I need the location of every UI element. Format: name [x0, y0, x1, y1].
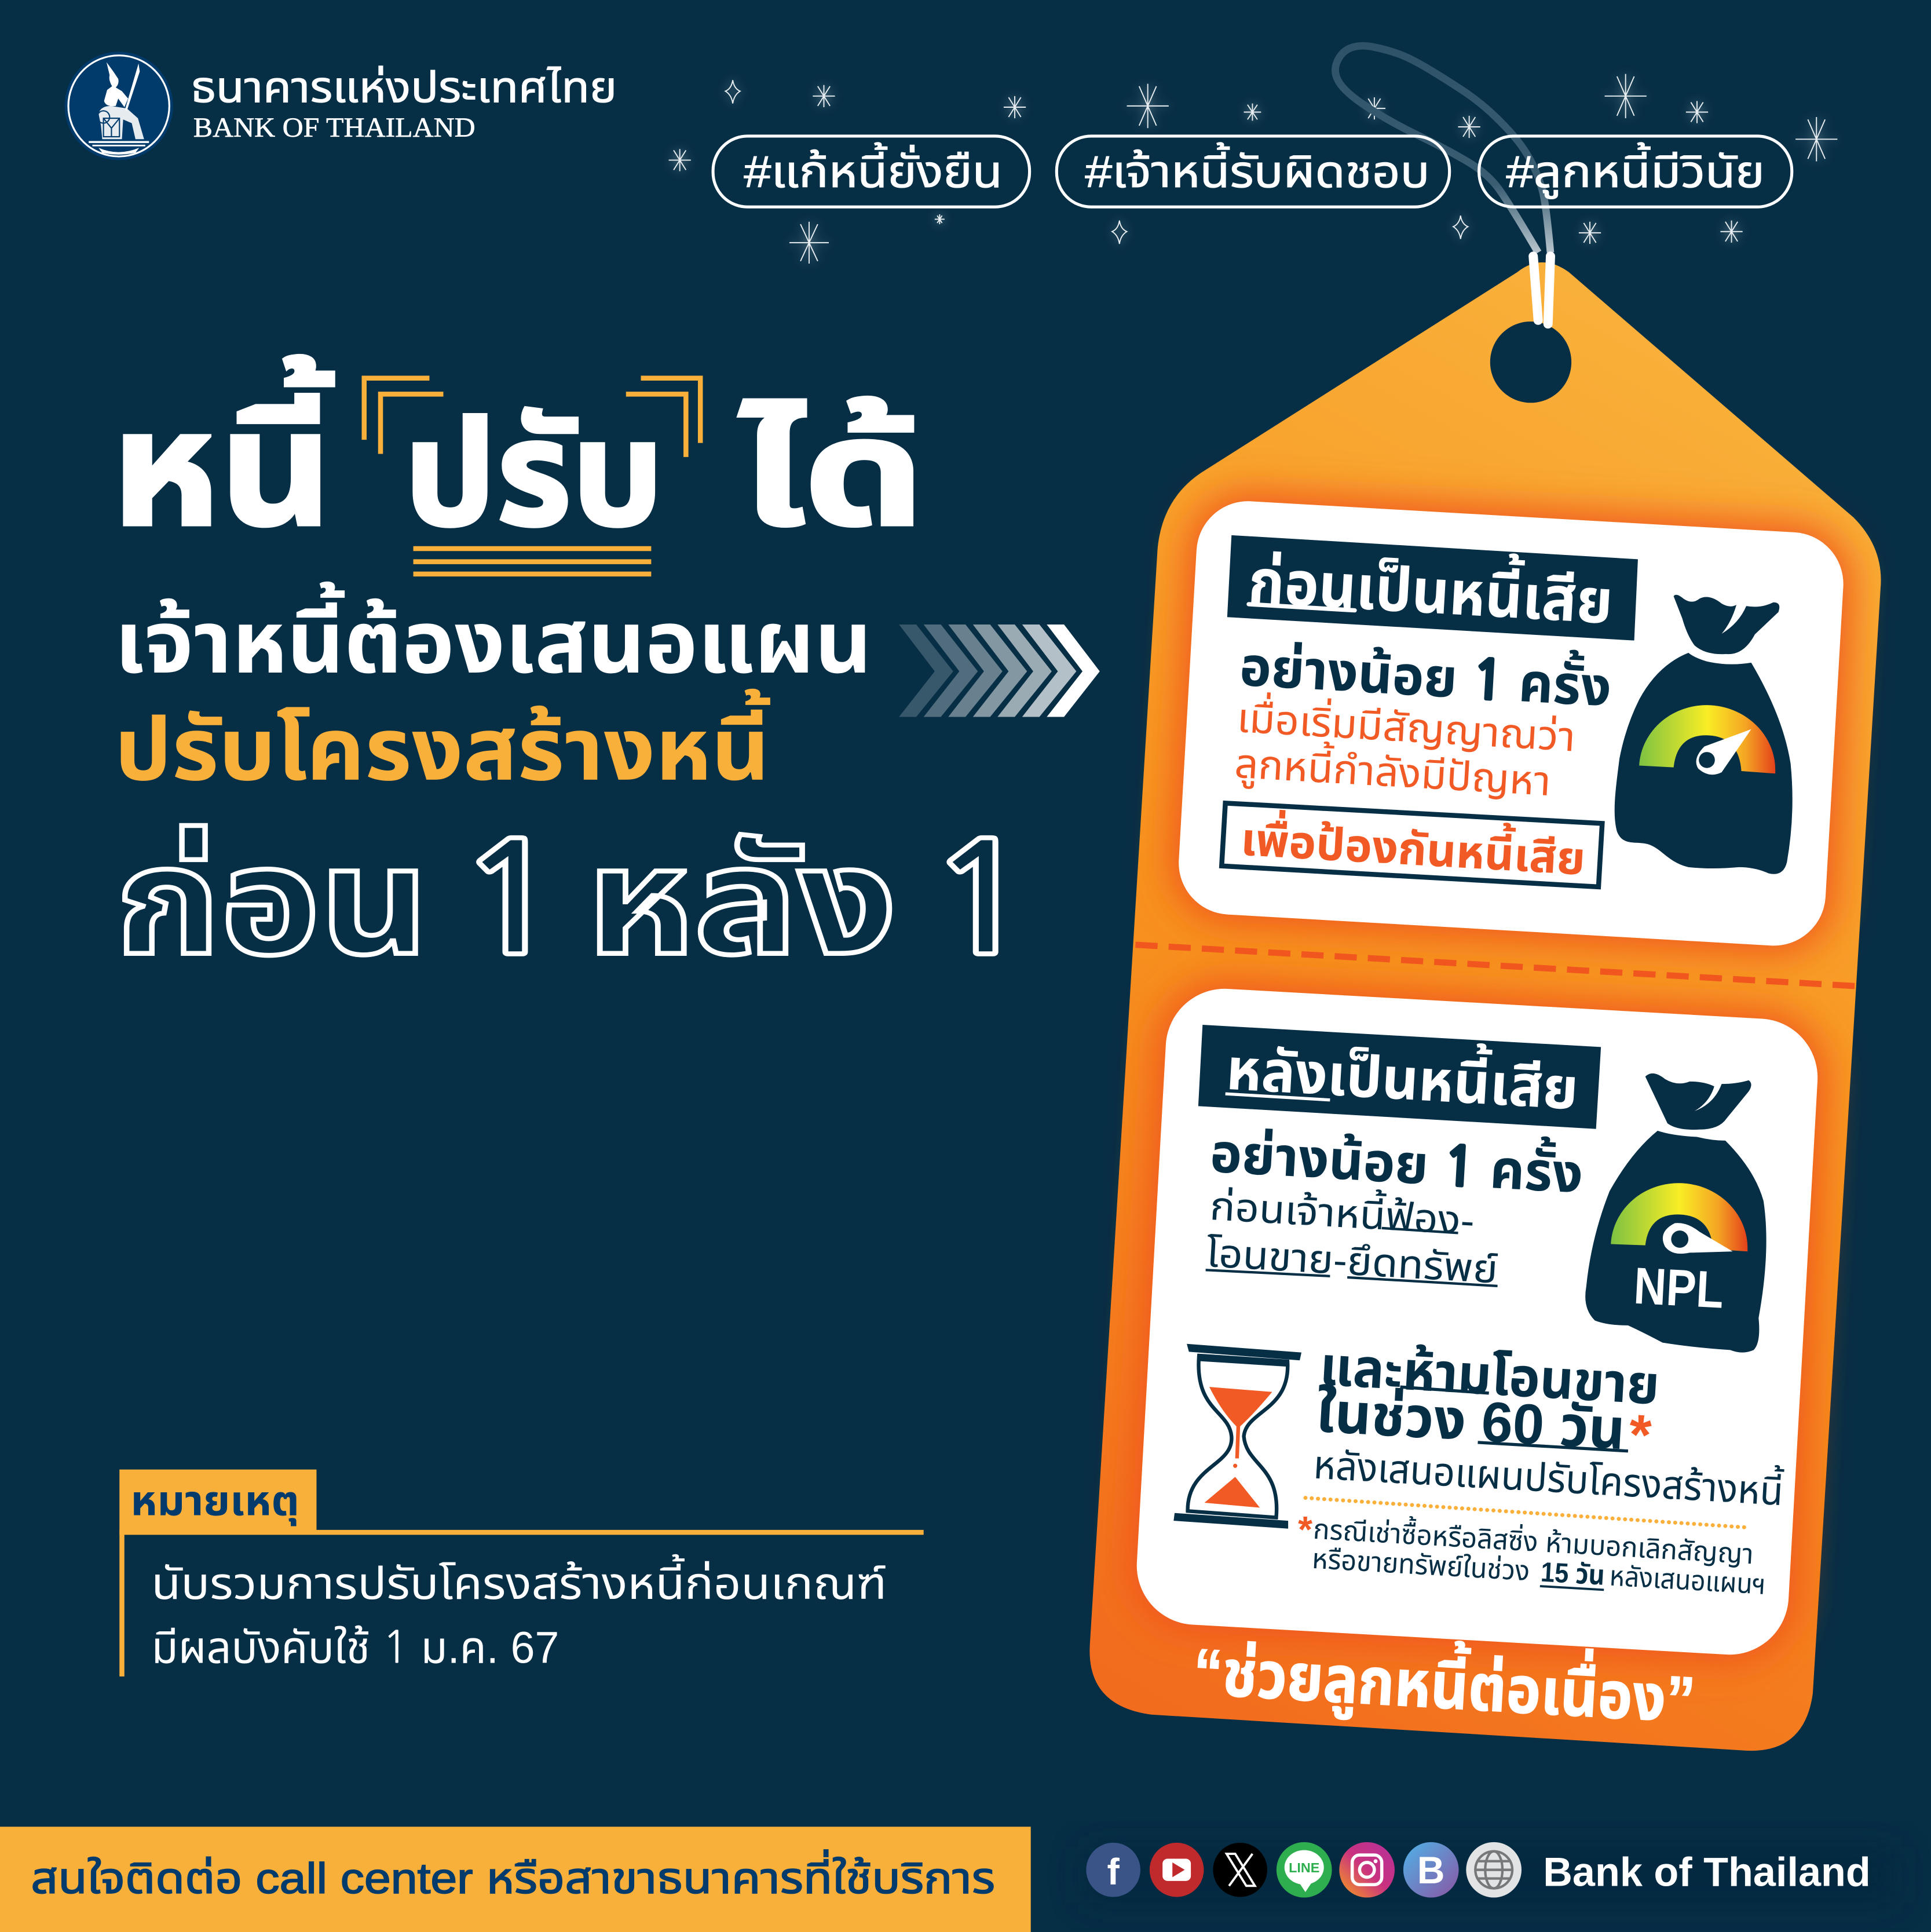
- icon: LINE: LINE: [1289, 1860, 1319, 1875]
- at least once: อย่างน้อย 1 ครั้ง: [1238, 630, 1614, 718]
- hashtag pill: responsible lender: [1056, 136, 1450, 207]
- hashtag pill: sustainable debt: #แก้หนี้ยั่งยืน: [744, 142, 1003, 197]
- hashtag pill: disciplined borrower: #ลูกหนี้มีวินัย: [1506, 142, 1765, 199]
- footer call-to-action bar: สนใจติดต่อ call center หรือสาขาธนาคารที่ใช้บริการ: [31, 1849, 995, 1902]
- icon: X: [1213, 1843, 1267, 1897]
- footnote: [1298, 1509, 1767, 1601]
- icon: instagram: [1339, 1842, 1395, 1898]
- tag body: [1089, 262, 1881, 1751]
- legal actions text: ก่อนเจ้าหนี้ฟ้อง-: [1209, 1179, 1476, 1243]
- footnote: *: [1298, 1509, 1312, 1550]
- note box: มีผลบังคับใช้ 1 ม.ค. 67: [152, 1623, 559, 1672]
- highlight brackets and underline: [364, 378, 700, 574]
- card: [1176, 498, 1846, 948]
- price tag: [1089, 256, 1881, 1751]
- footnote: กรณีเช่าซื้อหรือลิสซิ่ง ห้ามบอกเลิกสัญญา: [1312, 1510, 1754, 1571]
- outlined headline: before 1 after 1: 1: [926, 826, 1037, 977]
- icon: youtube: [1150, 1843, 1204, 1897]
- legal actions text: โอนขาย-ยึดทรัพย์: [1205, 1231, 1499, 1292]
- icon: website globe: [1466, 1842, 1522, 1898]
- social icon shadow: [1084, 1847, 1896, 1903]
- icon: facebook: [1086, 1843, 1140, 1897]
- note box: หมายเหตุ: [130, 1478, 299, 1526]
- footnote: 15 วัน: [1540, 1557, 1605, 1591]
- no transfer during 60 days: *: [1628, 1402, 1653, 1467]
- main headline: ปรับ: [404, 392, 664, 557]
- condition text: [1233, 691, 1577, 806]
- condition text: เมื่อเริ่มมีสัญญาณว่า: [1236, 691, 1577, 760]
- prevent NPL box: เพื่อป้องกันหนี้เสีย: [1239, 807, 1587, 885]
- outlined headline: before 1 after 1: [116, 817, 1037, 985]
- note text: นับรวมการปรับโครงสร้างหนี้ก่อนเกณฑ์: [152, 1554, 887, 1609]
- main headline: ได้: [739, 389, 925, 557]
- main headline: [111, 354, 925, 574]
- tag slogan: “ช่วยลูกหนี้ต่อเนื่อง”: [1191, 1626, 1698, 1740]
- footnote: หลังเสนอแผนฯ: [1609, 1561, 1767, 1601]
- tear line: [1135, 945, 1855, 986]
- no transfer during 60 days: [1315, 1335, 1661, 1467]
- hashtag pill: disciplined borrower: [1479, 136, 1792, 207]
- condition text: ลูกหนี้กำลังมีปัญหา: [1233, 736, 1552, 806]
- legal actions text: [1205, 1179, 1499, 1292]
- heading band: ก่อนเป็นหนี้เสีย: [1247, 538, 1615, 637]
- string clips: [1533, 256, 1550, 324]
- icon: blockdit: [1403, 1842, 1459, 1898]
- organisation name: ธนาคารแห่งประเทศไทย: [191, 63, 617, 111]
- icon: LINE: [1277, 1842, 1332, 1898]
- logo: Bank of Thailand emblem: [65, 52, 173, 160]
- brand name: Bank of Thailand: [1543, 1849, 1871, 1894]
- icon: NPL bag with gauge: [1585, 1073, 1767, 1353]
- note label: [119, 1470, 316, 1531]
- icon: hourglass: [1173, 1344, 1301, 1529]
- hashtag pill: responsible lender: #เจ้าหนี้รับผิดชอบ: [1085, 142, 1430, 197]
- icon: facebook: f: [1107, 1851, 1120, 1893]
- outlined headline: before 1 after 1: ก่อน: [116, 817, 429, 985]
- icon: bag with gauge: [1615, 595, 1793, 874]
- outlined headline: before 1 after 1: หลัง: [586, 817, 897, 985]
- outlined headline: before 1 after 1: 1: [456, 826, 566, 977]
- at least once: อย่างน้อย 1 ครั้ง: [1209, 1117, 1585, 1204]
- no transfer during 60 days: ในช่วง 60 วัน: [1315, 1380, 1627, 1461]
- organisation name: BANK OF THAILAND: [193, 112, 476, 143]
- after submitting plan: หลังเสนอแผนปรับโครงสร้างหนี้: [1312, 1438, 1784, 1514]
- organisation name: [191, 63, 617, 143]
- no transfer during 60 days: และห้ามโอนขาย: [1318, 1335, 1661, 1416]
- hashtag pill: sustainable debt: [713, 136, 1030, 207]
- footnote: หรือขายทรัพย์ในช่วง: [1311, 1544, 1531, 1587]
- main headline: หนี้: [111, 354, 335, 560]
- icon: blockdit: B: [1417, 1849, 1445, 1891]
- card: [1133, 985, 1821, 1658]
- tag string: [1335, 46, 1550, 253]
- subheading: debt restructuring: ปรับโครงสร้างหนี้: [115, 688, 771, 798]
- arrow chevrons: [899, 624, 1100, 717]
- note box: [119, 1470, 924, 1677]
- decorative sparkles: [669, 74, 1837, 264]
- subheading: lenders must propose: เจ้าหนี้ต้องเสนอแผน: [115, 581, 872, 691]
- heading band: หลังเป็นหนี้เสีย: [1224, 1028, 1581, 1122]
- panel: after NPL: [1133, 985, 1821, 1658]
- panel: before NPL: [1176, 498, 1846, 948]
- card glow: [1133, 498, 1846, 1658]
- footer call-to-action bar: [0, 1827, 1031, 1932]
- icon: NPL bag with gauge: NPL: [1632, 1257, 1725, 1319]
